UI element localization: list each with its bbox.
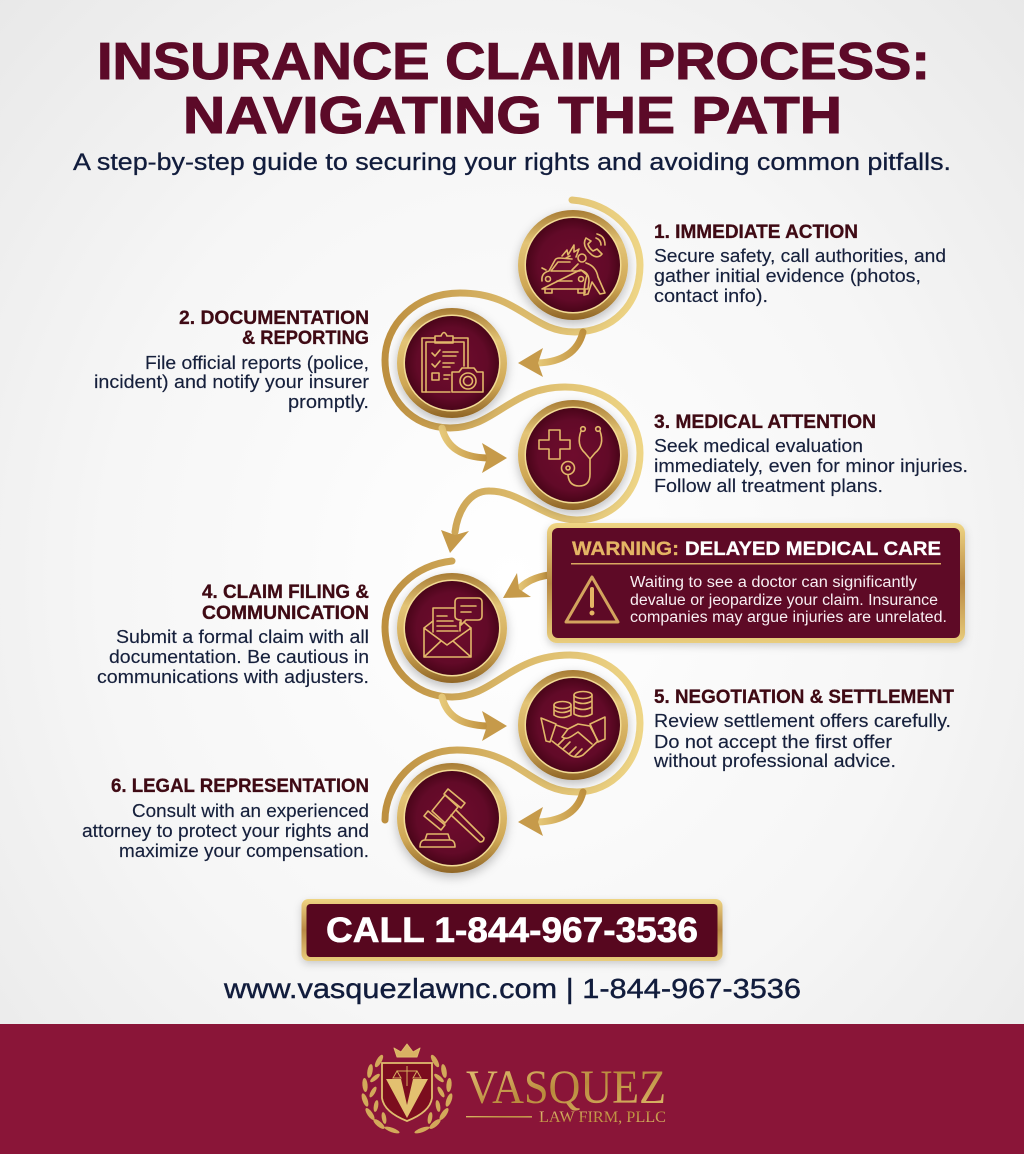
title — [97, 33, 930, 145]
step 4 text: 4. CLAIM FILING & — [202, 582, 369, 603]
arrow: step 5 to step 6 — [518, 792, 583, 836]
step 2 text: promptly. — [288, 391, 369, 412]
icon: laurel wreath — [360, 1054, 454, 1135]
step 1 text: 1. IMMEDIATE ACTION — [654, 222, 858, 243]
step 2 text: File official reports (police, — [145, 352, 369, 373]
website and phone: www.vasquezlawnc.com | 1-844-967-3536 — [223, 973, 801, 1004]
call button: CALL 1-844-967-3536 — [326, 911, 698, 950]
step 2 text: 2. DOCUMENTATION — [179, 308, 369, 329]
icon: warning triangle — [566, 577, 618, 622]
step 3 medallion: medical cross and stethoscope — [518, 400, 628, 510]
warning heading: DELAYED MEDICAL CARE — [685, 538, 941, 560]
step 5 text: without professional advice. — [653, 750, 896, 771]
step 4 text: documentation. Be cautious in — [109, 646, 369, 667]
warning text: devalue or jeopardize your claim. Insurance — [630, 592, 938, 609]
step 1 text — [654, 222, 946, 306]
step 6 text: 6. LEGAL REPRESENTATION — [111, 776, 369, 797]
icon: scales — [393, 1066, 421, 1086]
arrow: warning to step 4 — [503, 573, 549, 598]
warning text: companies may argue injuries are unrelated. — [630, 609, 947, 626]
warning text: Waiting to see a doctor can significantly — [630, 574, 917, 591]
step 2 text: incident) and notify your insurer — [94, 371, 369, 392]
step 6 text: attorney to protect your rights and — [82, 820, 369, 841]
step 5 text: 5. NEGOTIATION & SETTLEMENT — [654, 687, 954, 708]
step 3 text: 3. MEDICAL ATTENTION — [654, 412, 876, 433]
gold ribbon: steps 1 to 3 — [385, 200, 640, 532]
step 2 text — [94, 308, 369, 412]
step 1 medallion: car crash and phone — [518, 210, 628, 320]
warning heading: WARNING: — [572, 538, 679, 560]
arrow: step 1 to step 2 — [518, 332, 583, 377]
arrow: step 2 to step 3 — [442, 428, 507, 473]
warning text — [630, 574, 947, 626]
subtitle: A step-by-step guide to securing your rights and avoiding common pitfalls. — [73, 149, 951, 176]
arrow: step 4 to step 5 — [442, 697, 507, 741]
step 6 medallion: gavel — [397, 763, 507, 873]
step 4 text: COMMUNICATION — [202, 603, 369, 624]
step 3 text: Seek medical evaluation — [654, 435, 863, 456]
step 2 medallion: clipboard and camera — [397, 308, 507, 418]
icon: shield — [382, 1063, 432, 1121]
call button — [302, 899, 722, 961]
logo wordmark: VASQUEZ — [466, 1061, 666, 1114]
step 5 text: Do not accept the first offer — [654, 731, 892, 752]
title: NAVIGATING THE PATH — [183, 87, 842, 145]
step 2 text: & REPORTING — [242, 328, 369, 349]
footer band — [0, 1024, 1024, 1154]
warning panel — [547, 523, 965, 643]
step 6 text: maximize your compensation. — [119, 840, 369, 861]
logo emblem — [360, 1044, 454, 1135]
step 3 text: immediately, even for minor injuries. — [654, 455, 968, 476]
step 6 text — [82, 776, 369, 861]
step 4 text: Submit a formal claim with all — [116, 626, 369, 647]
step 1 text: contact info). — [654, 285, 768, 306]
icon: crown — [394, 1044, 420, 1057]
logo wordmark: LAW FIRM, PLLC — [539, 1109, 666, 1126]
step 4 medallion: envelope, letter and speech bubble — [397, 573, 507, 683]
step 4 text — [97, 582, 369, 687]
gold ribbon: steps 4 to 6 — [385, 561, 640, 820]
step 4 text: communications with adjusters. — [97, 666, 369, 687]
step 3 text: Follow all treatment plans. — [654, 475, 883, 496]
title: INSURANCE CLAIM PROCESS: — [97, 33, 930, 91]
step 5 medallion: coins and handshake — [518, 670, 628, 780]
arrow: step 3 to step 4 — [441, 530, 469, 553]
step 6 text: Consult with an experienced — [132, 800, 369, 821]
step 3 text — [654, 412, 968, 496]
step 1 text: Secure safety, call authorities, and — [654, 245, 946, 266]
step 1 text: gather initial evidence (photos, — [654, 265, 921, 286]
step 5 text: Review settlement offers carefully. — [654, 710, 951, 731]
icon: V monogram — [386, 1079, 428, 1118]
step 5 text — [653, 687, 954, 771]
